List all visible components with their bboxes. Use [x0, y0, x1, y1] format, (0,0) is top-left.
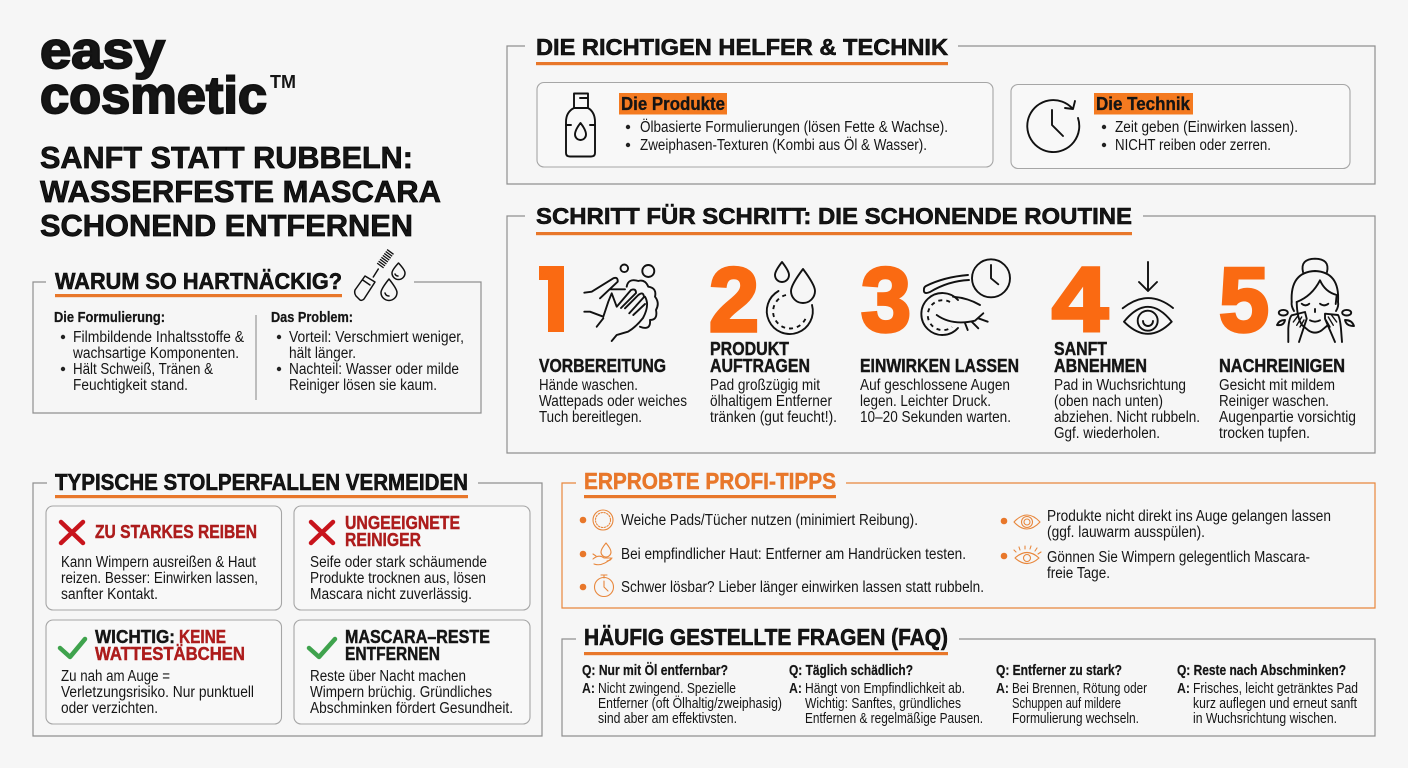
card: keine wattestäbchen: Zu nah am Auge = — [61, 668, 170, 685]
icon: clock with arrow — [1027, 100, 1079, 152]
faq: reste nach abschminken — [1177, 662, 1358, 727]
tip: mascara-freie tage: Gönnen Sie Wimpern gelegentlich Mascara- — [1047, 549, 1310, 566]
card: mascara-reste entfernen: MASCARA–RESTE — [345, 626, 490, 647]
tip: mascara-freie tage — [1001, 546, 1310, 582]
step 2: produkt auftragen — [709, 250, 837, 426]
card: ungeeignete reiniger: REINIGER — [345, 529, 421, 550]
icon: bottle with drop — [566, 94, 595, 156]
step 5: nachreinigen: 5 — [1219, 250, 1269, 351]
panel: erprobte profi-tipps — [562, 468, 1375, 608]
tip: produkte nicht ins auge: (ggf. lauwarm ausspülen). — [1047, 524, 1205, 541]
faq: nur mit öl: sind aber am effektivsten. — [598, 711, 737, 727]
text: die formulierung: Feuchtigkeit stand. — [73, 377, 188, 394]
card: keine wattestäbchen: WATTESTÄBCHEN — [95, 643, 245, 664]
card: die technik — [1011, 84, 1350, 168]
icon: pad with drops — [767, 262, 815, 334]
faq: entferner zu stark: A: — [996, 681, 1009, 697]
step 2: produkt auftragen: AUFTRAGEN — [710, 355, 810, 376]
card: ungeeignete reiniger: UNGEEIGNETE — [345, 512, 460, 533]
text: das problem — [271, 309, 464, 394]
tip: schwer lösbar — [580, 575, 984, 596]
faq: reste nach abschminken: in Wuchsrichtung wischen. — [1193, 711, 1337, 727]
text: das problem: Das Problem: — [271, 309, 353, 326]
faq: entferner zu stark: Schuppen auf mildere — [1012, 696, 1121, 712]
card: ungeeignete reiniger: Mascara nicht zuverlässig. — [310, 586, 472, 603]
panel: die richtigen helfer und technik — [507, 34, 1375, 184]
step 4: sanft abnehmen: abziehen. Nicht rubbeln. — [1054, 409, 1200, 426]
step 4: sanft abnehmen: SANFT — [1054, 338, 1108, 359]
step 5: nachreinigen: Augenpartie vorsichtig — [1219, 409, 1356, 426]
faq: nur mit öl: Nicht zwingend. Spezielle — [598, 681, 736, 697]
icon: eye with lashes — [1014, 546, 1041, 564]
title: SCHONEND ENTFERNEN — [40, 208, 413, 243]
faq: reste nach abschminken: Frisches, leicht getränktes Pad — [1193, 681, 1358, 697]
step 3: einwirken lassen: 3 — [861, 250, 911, 351]
card: zu starkes reiben — [46, 506, 282, 610]
icon: red cross — [61, 522, 83, 543]
text: die formulierung: wachsartige Komponenten. — [72, 345, 239, 362]
step 4: sanft abnehmen: Ggf. wiederholen. — [1054, 425, 1160, 442]
tip: weiche pads — [580, 510, 918, 530]
text: die formulierung: Filmbildende Inhaltsstoffe & — [73, 329, 245, 346]
icon: washing hands — [584, 264, 658, 341]
card: zu starkes reiben: Kann Wimpern ausreißen & Haut — [61, 554, 257, 571]
step 4: sanft abnehmen: Pad in Wuchsrichtung — [1054, 377, 1186, 394]
text: das problem: Nachteil: Wasser oder milde — [289, 361, 459, 378]
icon: pad — [593, 510, 613, 530]
step 2: produkt auftragen: 2 — [709, 250, 759, 351]
card: die produkte: Die Produkte — [621, 94, 725, 114]
step 2: produkt auftragen: ölhaltigem Entferner — [710, 393, 832, 410]
logo: easy cosmetic: cosmetic — [40, 67, 267, 125]
faq: täglich schädlich: Entfernen & regelmäßige Pausen. — [805, 711, 983, 727]
title: SANFT STATT RUBBELN: — [40, 140, 413, 175]
step 5: nachreinigen — [1219, 250, 1356, 442]
card: keine wattestäbchen: oder verzichten. — [61, 700, 158, 717]
card: zu starkes reiben: reizen. Besser: Einwirken lassen, — [61, 570, 258, 587]
card: mascara-reste entfernen — [294, 620, 530, 724]
step 4: sanft abnehmen: 4 — [1052, 250, 1108, 351]
icon: eye — [1014, 515, 1040, 529]
heading: faq: HÄUFIG GESTELLTE FRAGEN (FAQ) — [584, 624, 948, 650]
faq: nur mit öl: A: — [582, 681, 595, 697]
icon: red cross — [311, 522, 333, 543]
title — [40, 140, 441, 243]
logo: easy cosmetic — [40, 22, 296, 125]
step 1: vorbereitung: Tuch bereitlegen. — [539, 409, 642, 426]
icon: stopwatch — [594, 575, 614, 596]
step 3: einwirken lassen: EINWIRKEN LASSEN — [860, 355, 1019, 376]
faq: entferner zu stark: Bei Brennen, Rötung oder — [1012, 681, 1147, 697]
step 5: nachreinigen: Gesicht mit mildem — [1219, 377, 1335, 394]
step 2: produkt auftragen: PRODUKT — [710, 338, 790, 359]
step 1: vorbereitung: 1 — [534, 250, 568, 351]
heading: warum so hartnäckig: WARUM SO HARTNÄCKIG? — [55, 268, 342, 294]
faq: täglich schädlich: Q: Täglich schädlich? — [789, 662, 913, 679]
tip: produkte nicht ins auge — [1001, 508, 1331, 541]
tip: mascara-freie tage: freie Tage. — [1047, 565, 1110, 582]
card: ungeeignete reiniger: Seife oder stark schäumende — [310, 554, 487, 571]
icon: eye with down arrow — [1123, 262, 1173, 334]
step 2: produkt auftragen: tränken (gut feucht!). — [710, 409, 837, 426]
step 5: nachreinigen: trocken tupfen. — [1219, 425, 1310, 442]
faq: reste nach abschminken: Q: Reste nach Abschminken? — [1177, 662, 1346, 679]
faq: täglich schädlich: Hängt von Empfindlichkeit ab. — [805, 681, 965, 697]
text: das problem: Vorteil: Verschmiert weniger, — [289, 329, 464, 346]
card: die produkte: Zweiphasen-Texturen (Kombi aus Öl & Wasser). — [640, 136, 927, 154]
card: keine wattestäbchen: KEINE — [179, 626, 226, 647]
faq: nur mit öl — [582, 662, 782, 727]
text: die formulierung — [54, 309, 245, 394]
icon: green check — [309, 639, 335, 657]
heading: profi-tipps: ERPROBTE PROFI-TIPPS — [584, 468, 836, 494]
faq: reste nach abschminken: A: — [1177, 681, 1190, 697]
logo: easy cosmetic: TM — [270, 72, 296, 92]
step 4: sanft abnehmen: ABNEHMEN — [1054, 355, 1147, 376]
heading: helfer und technik: DIE RICHTIGEN HELFER & TECHNIK — [536, 34, 948, 60]
icon: face with hands — [1277, 259, 1354, 342]
step 1: vorbereitung — [538, 264, 686, 426]
step 4: sanft abnehmen — [1052, 250, 1200, 442]
card: zu starkes reiben: sanfter Kontakt. — [61, 586, 158, 603]
tip: schwer lösbar: Schwer lösbar? Lieber länger einwirken lassen statt rubbeln. — [621, 579, 984, 596]
tip: produkte nicht ins auge: Produkte nicht direkt ins Auge gelangen lassen — [1047, 508, 1331, 525]
faq: täglich schädlich: A: — [789, 681, 802, 697]
card: mascara-reste entfernen: Abschminken fördert Gesundheit. — [310, 700, 513, 717]
faq: entferner zu stark: Formulierung wechseln. — [1012, 711, 1139, 727]
faq: nur mit öl: Entferner (oft Ölhaltig/zweiphasig) — [598, 694, 782, 712]
faq: täglich schädlich — [789, 662, 983, 727]
step 2: produkt auftragen: Pad großzügig mit — [710, 377, 821, 394]
panel: warum so hartnäckig — [33, 251, 481, 413]
text: die formulierung: Hält Schweiß, Tränen & — [73, 361, 214, 378]
heading: stolperfallen: TYPISCHE STOLPERFALLEN VERMEIDEN — [55, 469, 468, 495]
tip: weiche pads: Weiche Pads/Tücher nutzen (minimiert Reibung). — [621, 512, 918, 529]
tip: empfindliche haut — [580, 543, 966, 565]
tip: empfindliche haut: Bei empfindlicher Haut: Entferner am Handrücken testen. — [621, 546, 966, 563]
step 3: einwirken lassen: Auf geschlossene Augen — [860, 377, 1010, 394]
text: das problem: hält länger. — [289, 345, 356, 362]
card: die produkte: Ölbasierte Formulierungen (lösen Fette & Wachse). — [640, 118, 948, 136]
icon: hand with drop — [593, 543, 612, 565]
faq: täglich schädlich: Wichtig: Sanftes, gründliches — [805, 696, 961, 712]
card: zu starkes reiben: ZU STARKES REIBEN — [95, 521, 257, 542]
panel: schritt für schritt — [507, 203, 1375, 453]
faq: entferner zu stark: Q: Entferner zu stark? — [996, 662, 1122, 679]
faq: entferner zu stark — [996, 662, 1147, 727]
text: das problem: Reiniger lösen sie kaum. — [289, 377, 437, 394]
card: die technik: Die Technik — [1096, 94, 1191, 114]
faq: nur mit öl: Q: Nur mit Öl entfernbar? — [582, 662, 728, 679]
step 3: einwirken lassen — [860, 250, 1019, 426]
card: keine wattestäbchen: WICHTIG: — [95, 626, 175, 647]
text: die formulierung: Die Formulierung: — [54, 309, 165, 326]
icon: mascara wand and drops — [355, 251, 405, 300]
panel: faq — [562, 624, 1375, 736]
card: die produkte — [537, 82, 993, 167]
logo: easy cosmetic: easy — [40, 22, 165, 80]
icon: green check — [60, 639, 85, 657]
card: die technik: NICHT reiben oder zerren. — [1115, 137, 1271, 154]
card: ungeeignete reiniger: Produkte trocknen aus, lösen — [310, 570, 486, 587]
card: keine wattestäbchen — [46, 620, 282, 724]
card: keine wattestäbchen: Verletzungsrisiko. Nur punktuell — [61, 684, 254, 701]
step 3: einwirken lassen: 10–20 Sekunden warten. — [860, 409, 1011, 426]
step 5: nachreinigen: NACHREINIGEN — [1219, 355, 1345, 376]
card: die technik: Zeit geben (Einwirken lassen). — [1115, 119, 1298, 136]
card: ungeeignete reiniger — [294, 506, 530, 610]
faq: reste nach abschminken: kurz auflegen und erneut sanft — [1193, 696, 1357, 712]
icon: eye with pad and clock — [921, 259, 1010, 335]
step 3: einwirken lassen: legen. Leichter Druck. — [860, 393, 991, 410]
card: mascara-reste entfernen: ENTFERNEN — [345, 643, 440, 664]
step 1: vorbereitung: Wattepads oder weiches — [539, 393, 687, 410]
step 1: vorbereitung: VORBEREITUNG — [539, 355, 666, 376]
title: WASSERFESTE MASCARA — [40, 174, 441, 209]
step 5: nachreinigen: Reiniger waschen. — [1219, 393, 1329, 410]
step 1: vorbereitung: Hände waschen. — [539, 377, 638, 394]
card: mascara-reste entfernen: Wimpern brüchig. Gründliches — [310, 684, 492, 701]
panel: typische stolperfallen — [33, 469, 542, 736]
card: mascara-reste entfernen: Reste über Nacht machen — [310, 668, 466, 685]
step 4: sanft abnehmen: (oben nach unten) — [1054, 393, 1163, 410]
heading: routine: SCHRITT FÜR SCHRITT: DIE SCHONENDE ROUTINE — [536, 203, 1132, 229]
